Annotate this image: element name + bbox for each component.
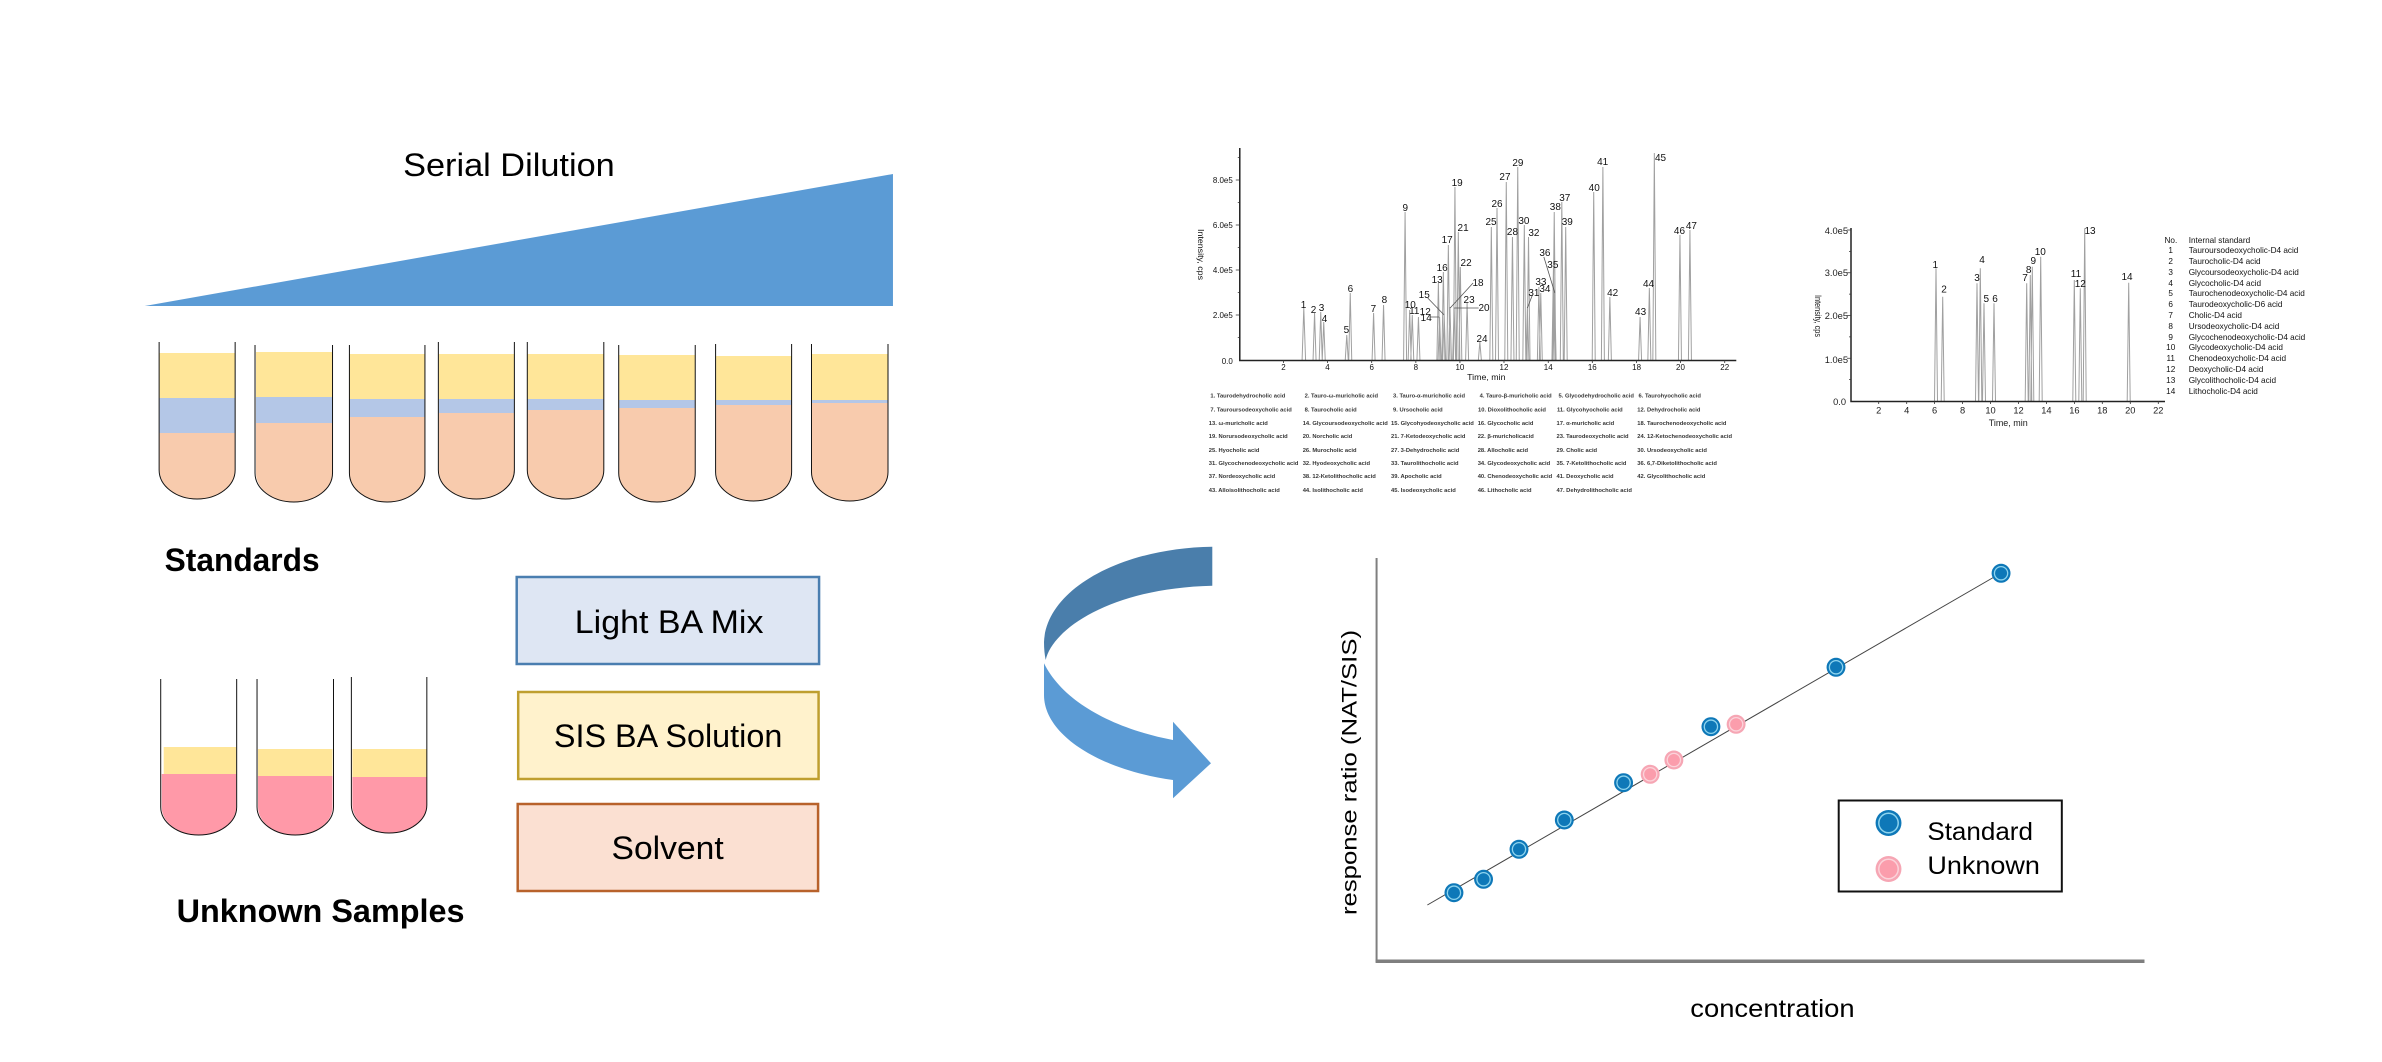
- table: internal standards: Tauroursodeoxycholic-D4 acid: [2189, 246, 2299, 255]
- table: internal standards: Taurocholic-D4 acid: [2189, 257, 2261, 266]
- compound list: 47 bile acids: 37. Nordeoxycholic acid: [1209, 474, 1276, 480]
- compound list: 47 bile acids: 24. 12-Ketochenodeoxycholic acid: [1637, 434, 1732, 440]
- panel: standards tubes: [159, 342, 888, 502]
- peak number labels: 15: [1419, 290, 1430, 301]
- peak number labels: [1933, 226, 2133, 305]
- y tick labels: 2.0e5: [1213, 311, 1233, 320]
- peak number labels: 34: [1539, 284, 1551, 295]
- y axis title: Intensity, cps: [1813, 295, 1823, 337]
- chart: bile acid chromatogram: [1196, 148, 1736, 382]
- compound list: 47 bile acids: 43. Alloisolithocholic acid: [1209, 488, 1280, 494]
- table: internal standards: Glycolithocholic-D4 acid: [2189, 376, 2277, 385]
- table: internal standards: Deoxycholic-D4 acid: [2189, 365, 2264, 374]
- x axis title: Time, min: [1467, 373, 1505, 382]
- peak number labels: 39: [1562, 217, 1573, 228]
- legend box: SIS BA solution: [518, 692, 819, 779]
- compound list: 47 bile acids: 33. Taurolithocholic acid: [1391, 461, 1459, 467]
- peak number labels: 37: [1559, 193, 1571, 204]
- table: internal standards: 7: [2168, 311, 2173, 320]
- peak number labels: 11: [1409, 306, 1420, 317]
- compound list: 47 bile acids: 9. Ursocholic acid: [1393, 408, 1443, 414]
- legend box: solvent: [518, 804, 818, 891]
- y tick labels: 3.0e5: [1825, 268, 1848, 278]
- x tick labels: 6: [1369, 363, 1374, 372]
- peak number labels: 3: [1319, 303, 1325, 314]
- table: internal standards: 14: [2166, 387, 2176, 396]
- compound list: 47 bile acids: 40. Chenodeoxycholic acid: [1478, 474, 1553, 480]
- peak number labels: [1301, 153, 1697, 345]
- compound list: 47 bile acids: 29. Cholic acid: [1556, 448, 1598, 454]
- table: internal standards: 9: [2168, 333, 2173, 342]
- peak number labels: 26: [1491, 199, 1503, 210]
- table: internal standards: 2: [2168, 257, 2173, 266]
- standard points: [1444, 564, 2011, 902]
- axes: [1376, 558, 2144, 963]
- compound list: 47 bile acids: 12. Dehydrocholic acid: [1637, 408, 1701, 414]
- peak number labels: 10: [1405, 300, 1416, 311]
- x tick labels: 16: [1588, 363, 1597, 372]
- peak number labels: 41: [1597, 157, 1609, 168]
- axis ticks: [1847, 230, 2158, 404]
- peak number labels: 1: [1933, 260, 1939, 271]
- peak number labels: 17: [1442, 235, 1453, 246]
- x tick labels: [1876, 406, 2163, 416]
- compound list: 47 bile acids: 42. Glycolithocholic acid: [1637, 474, 1706, 480]
- peak number labels: 4: [1979, 255, 1985, 266]
- table: internal standards: Cholic-D4 acid: [2189, 311, 2242, 320]
- x tick labels: 2: [1876, 406, 1881, 416]
- legend box: light BA mix: Light BA Mix: [575, 604, 764, 640]
- x tick labels: 12: [1500, 363, 1509, 372]
- compound list: 47 bile acids: 27. 3-Dehydrocholic acid: [1391, 448, 1460, 454]
- tube 5: [527, 342, 604, 499]
- compound list: 47 bile acids: 19. Norursodeoxycholic acid: [1209, 434, 1288, 440]
- peak number labels: 32: [1528, 228, 1540, 239]
- compound list: 47 bile acids: 3. Tauro-α-muricholic acid: [1393, 394, 1466, 400]
- x tick labels: [1281, 363, 1730, 372]
- compound list: 47 bile acids: 38. 12-Ketolithocholic acid: [1303, 474, 1376, 480]
- axes: [1851, 228, 2165, 402]
- table: internal standards: 6: [2168, 300, 2173, 309]
- compound list: 47 bile acids: 21. 7-Ketodeoxycholic acid: [1391, 434, 1466, 440]
- fit line: [1427, 573, 2001, 905]
- compound list: 47 bile acids: 25. Hyocholic acid: [1209, 448, 1260, 454]
- table: internal standards: [2164, 236, 2306, 396]
- peak number labels: 5: [1984, 294, 1990, 305]
- peak number labels: 9: [2031, 256, 2037, 267]
- axis ticks: [1236, 158, 1725, 363]
- table: internal standards: 13: [2166, 376, 2176, 385]
- peak number labels: 22: [1461, 258, 1472, 269]
- peak number labels: 19: [1452, 178, 1463, 189]
- table: internal standards: Glycocholic-D4 acid: [2189, 279, 2261, 288]
- compound list: 47 bile acids: 14. Glycoursodeoxycholic acid: [1303, 421, 1388, 427]
- compound list: 47 bile acids: 41. Deoxycholic acid: [1556, 474, 1614, 480]
- peak number labels: 21: [1458, 223, 1469, 234]
- table: internal standards: Lithocholic-D4 acid: [2189, 387, 2258, 396]
- table: internal standards: 3: [2168, 268, 2173, 277]
- legend box: light BA mix: [517, 577, 819, 664]
- legend: Standard: [1927, 818, 2033, 846]
- peak number labels: 46: [1674, 226, 1685, 237]
- x tick labels: 16: [2069, 406, 2080, 416]
- peak number labels: 1: [1301, 300, 1307, 311]
- y tick labels: 6.0e5: [1213, 221, 1233, 230]
- tube 6: [619, 345, 695, 502]
- compound list: 47 bile acids: 18. Taurochenodeoxycholic acid: [1637, 421, 1727, 427]
- peak number labels: 31: [1528, 288, 1540, 299]
- peak number labels: 24: [1477, 334, 1488, 345]
- y axis title: Intensity, cps: [1196, 229, 1205, 280]
- x tick labels: 8: [1960, 406, 1965, 416]
- peak number labels: 42: [1607, 288, 1619, 299]
- heading: unknown samples: Unknown Samples: [177, 893, 465, 929]
- x tick labels: 22: [2153, 406, 2163, 416]
- unknown points: [1641, 715, 1746, 784]
- compound list: 47 bile acids: 8. Taurocholic acid: [1305, 408, 1357, 414]
- x axis title: concentration: [1690, 995, 1855, 1023]
- peak number labels: 45: [1655, 153, 1667, 164]
- x tick labels: 2: [1281, 363, 1286, 372]
- tube 7: [716, 344, 792, 501]
- compound list: 47 bile acids: 7. Tauroursodeoxycholic acid: [1210, 408, 1292, 414]
- peak number labels: 40: [1589, 183, 1600, 194]
- peak number labels: 6: [1348, 284, 1354, 295]
- table: internal standards: 1: [2168, 246, 2173, 255]
- table: internal standards: 8: [2168, 322, 2173, 331]
- tube 1: [159, 342, 235, 499]
- unknown tube 2: [257, 679, 333, 835]
- compound list: 47 bile acids: 28. Allocholic acid: [1478, 448, 1529, 454]
- x tick labels: 18: [1632, 363, 1642, 372]
- compound list: 47 bile acids: 44. Isolithocholic acid: [1303, 488, 1363, 494]
- peak number labels: 47: [1686, 221, 1697, 232]
- peak number labels: 14: [1421, 313, 1432, 324]
- peak number labels: 3: [1974, 273, 1980, 284]
- compound list: 47 bile acids: 32. Hyodeoxycholic acid: [1303, 461, 1370, 467]
- compound list: 47 bile acids: 10. Dioxolithocholic acid: [1478, 408, 1546, 414]
- peak number labels: 18: [1473, 278, 1484, 289]
- chart: calibration curve: [1339, 558, 2144, 1023]
- peak number labels: 44: [1643, 279, 1655, 290]
- peak number labels: 9: [1403, 203, 1409, 214]
- x tick labels: 8: [1414, 363, 1419, 372]
- y tick labels: 4.0e5: [1825, 226, 1848, 236]
- peak number labels: 6: [1992, 294, 1998, 305]
- peak number labels: 2: [1311, 305, 1317, 316]
- peak number labels: 23: [1464, 295, 1475, 306]
- peak number labels: 10: [2035, 247, 2046, 258]
- peak number labels: 28: [1507, 227, 1518, 238]
- peak number labels: 27: [1499, 172, 1511, 183]
- heading: serial dilution: Serial Dilution: [403, 147, 615, 183]
- y tick labels: 1.0e5: [1825, 355, 1848, 365]
- peak number labels: 5: [1344, 325, 1350, 336]
- peak number labels: 38: [1550, 202, 1561, 213]
- x tick labels: 10: [1455, 363, 1465, 372]
- compound list: 47 bile acids: 11. Glycohyocholic acid: [1557, 408, 1623, 414]
- compound list: 47 bile acids: 39. Apocholic acid: [1391, 474, 1442, 480]
- arrow: curved workflow arrow: [1044, 547, 1212, 798]
- peak number labels: 14: [2121, 272, 2133, 283]
- peak number labels: 20: [1479, 303, 1490, 314]
- table: internal standards: 5: [2168, 289, 2173, 298]
- legend: Unknown: [1927, 852, 2040, 880]
- panel: unknown sample tubes: [161, 677, 427, 835]
- peak number labels: 35: [1547, 260, 1559, 271]
- legend: [1839, 800, 2062, 892]
- table: internal standards: Chenodeoxycholic-D4 acid: [2189, 354, 2287, 363]
- table: internal standards: Taurochenodeoxycholic-D4 acid: [2189, 289, 2305, 298]
- y tick labels: 0.0: [1222, 357, 1233, 366]
- tube 2: [255, 345, 333, 502]
- peak number labels: 7: [1371, 304, 1377, 315]
- y tick labels: 0.0: [1833, 397, 1846, 407]
- table: internal standards: 12: [2166, 365, 2176, 374]
- compound list: 47 bile acids: 45. Isodeoxycholic acid: [1391, 488, 1456, 494]
- table: internal standards: Glycochenodeoxycholic-D4 acid: [2189, 333, 2306, 342]
- peak number labels: 33: [1535, 277, 1547, 288]
- x tick labels: 22: [1720, 363, 1730, 372]
- compound list: 47 bile acids: 26. Murocholic acid: [1303, 448, 1357, 454]
- x tick labels: 4: [1325, 363, 1330, 372]
- y axis title: response ratio (NAT/SIS): [1339, 630, 1362, 915]
- peak number labels: 8: [1382, 295, 1388, 306]
- x tick labels: 18: [2097, 406, 2107, 416]
- compound list: 47 bile acids: 20. Norcholic acid: [1303, 434, 1353, 440]
- tube 4: [438, 342, 514, 499]
- peak number labels: 2: [1941, 285, 1947, 296]
- peak number labels: 8: [2026, 265, 2032, 276]
- peak number labels: 12: [2075, 279, 2086, 290]
- compound list: 47 bile acids: 16. Glycocholic acid: [1478, 421, 1534, 427]
- x tick labels: 4: [1904, 406, 1909, 416]
- y tick labels: [1825, 226, 1848, 407]
- compound list: 47 bile acids: 4. Tauro-β-muricholic acid: [1480, 394, 1552, 400]
- peak number labels: 13: [1432, 275, 1443, 286]
- compound list: 47 bile acids: 1. Taurodehydrocholic acid: [1210, 394, 1286, 400]
- table: internal standards: Glycodeoxycholic-D4 acid: [2189, 343, 2283, 352]
- x tick labels: 20: [2125, 406, 2135, 416]
- x tick labels: 20: [1676, 363, 1685, 372]
- y tick labels: 4.0e5: [1213, 266, 1233, 275]
- compound list: 47 bile acids: 13. ω-muricholic acid: [1209, 421, 1268, 427]
- peak number labels: 29: [1512, 158, 1524, 169]
- x tick labels: 6: [1932, 406, 1937, 416]
- legend box: solvent: Solvent: [612, 830, 724, 866]
- table: internal standards: Glycoursodeoxycholic-D4 acid: [2189, 268, 2299, 277]
- peaks: [1302, 153, 1691, 360]
- compound list: 47 bile acids: 36. 6,7-Diketolithocholic acid: [1637, 461, 1717, 467]
- peak number labels: 16: [1437, 263, 1448, 274]
- compound list: 47 bile acids: 31. Glycochenodeoxycholic acid: [1209, 461, 1299, 467]
- x tick labels: 14: [2041, 406, 2052, 416]
- peak number labels: 11: [2071, 269, 2082, 280]
- compound list: 47 bile acids: 2. Tauro-ω-muricholic acid: [1305, 394, 1378, 400]
- compound list: 47 bile acids: 17. α-muricholic acid: [1556, 421, 1615, 427]
- compound list: 47 bile acids: 46. Lithocholic acid: [1478, 488, 1532, 494]
- y tick labels: 8.0e5: [1213, 176, 1233, 185]
- compound list: 47 bile acids: 30. Ursodeoxycholic acid: [1637, 448, 1707, 454]
- unknown tube 1: [161, 679, 237, 835]
- table: internal standards: Internal standard: [2189, 236, 2251, 245]
- compound list: 47 bile acids: 15. Glycohyodeoxycholic acid: [1391, 421, 1474, 427]
- table: internal standards: 11: [2166, 354, 2175, 363]
- tube 3: [349, 345, 425, 502]
- compound list: 47 bile acids: 35. 7-Ketolithocholic acid: [1556, 461, 1627, 467]
- y tick labels: 2.0e5: [1825, 311, 1848, 321]
- unknown tube 3: [351, 677, 427, 833]
- chart: internal standard chromatogram: [1813, 226, 2165, 428]
- peak number labels: 4: [1322, 314, 1328, 325]
- table: internal standards: Ursodeoxycholic-D4 acid: [2189, 322, 2280, 331]
- internal standard peaks: [1934, 228, 2130, 401]
- peak number labels: 13: [2084, 226, 2096, 237]
- peak number labels: 25: [1485, 217, 1497, 228]
- wedge: dilution gradient: [145, 174, 893, 306]
- compound list: 47 bile acids: 47. Dehydrolithocholic acid: [1556, 488, 1632, 494]
- peak number labels: 43: [1635, 307, 1647, 318]
- y tick labels: [1213, 176, 1233, 366]
- peak number labels: 7: [2022, 273, 2028, 284]
- x axis title: Time, min: [1989, 418, 2028, 428]
- compound list: 47 bile acids: 5. Glycodehydrocholic acid: [1558, 394, 1634, 400]
- compound list: 47 bile acids: 6. Taurohyocholic acid: [1638, 394, 1701, 400]
- table: internal standards: 4: [2168, 279, 2173, 288]
- peak number labels: 12: [1420, 307, 1431, 318]
- table: internal standards: 10: [2166, 343, 2176, 352]
- compound list: 47 bile acids: [1209, 394, 1732, 494]
- axes: [1240, 148, 1736, 360]
- x tick labels: 14: [1544, 363, 1553, 372]
- compound list: 47 bile acids: 23. Taurodeoxycholic acid: [1556, 434, 1629, 440]
- x tick labels: 12: [2013, 406, 2024, 416]
- compound list: 47 bile acids: 34. Glycodeoxycholic acid: [1478, 461, 1551, 467]
- compound list: 47 bile acids: 22. β-muricholicacid: [1478, 434, 1534, 440]
- table: internal standards: No.: [2164, 236, 2177, 245]
- tube 8: [811, 344, 888, 501]
- peak number labels: 30: [1518, 216, 1530, 227]
- table: internal standards: Taurodeoxycholic-D6 acid: [2189, 300, 2283, 309]
- peak number labels: 36: [1539, 248, 1551, 259]
- legend box: SIS BA solution: SIS BA Solution: [554, 718, 782, 754]
- peak leader lines: [1428, 257, 1555, 317]
- heading: standards: Standards: [165, 542, 320, 578]
- x tick labels: 10: [1985, 406, 1996, 416]
